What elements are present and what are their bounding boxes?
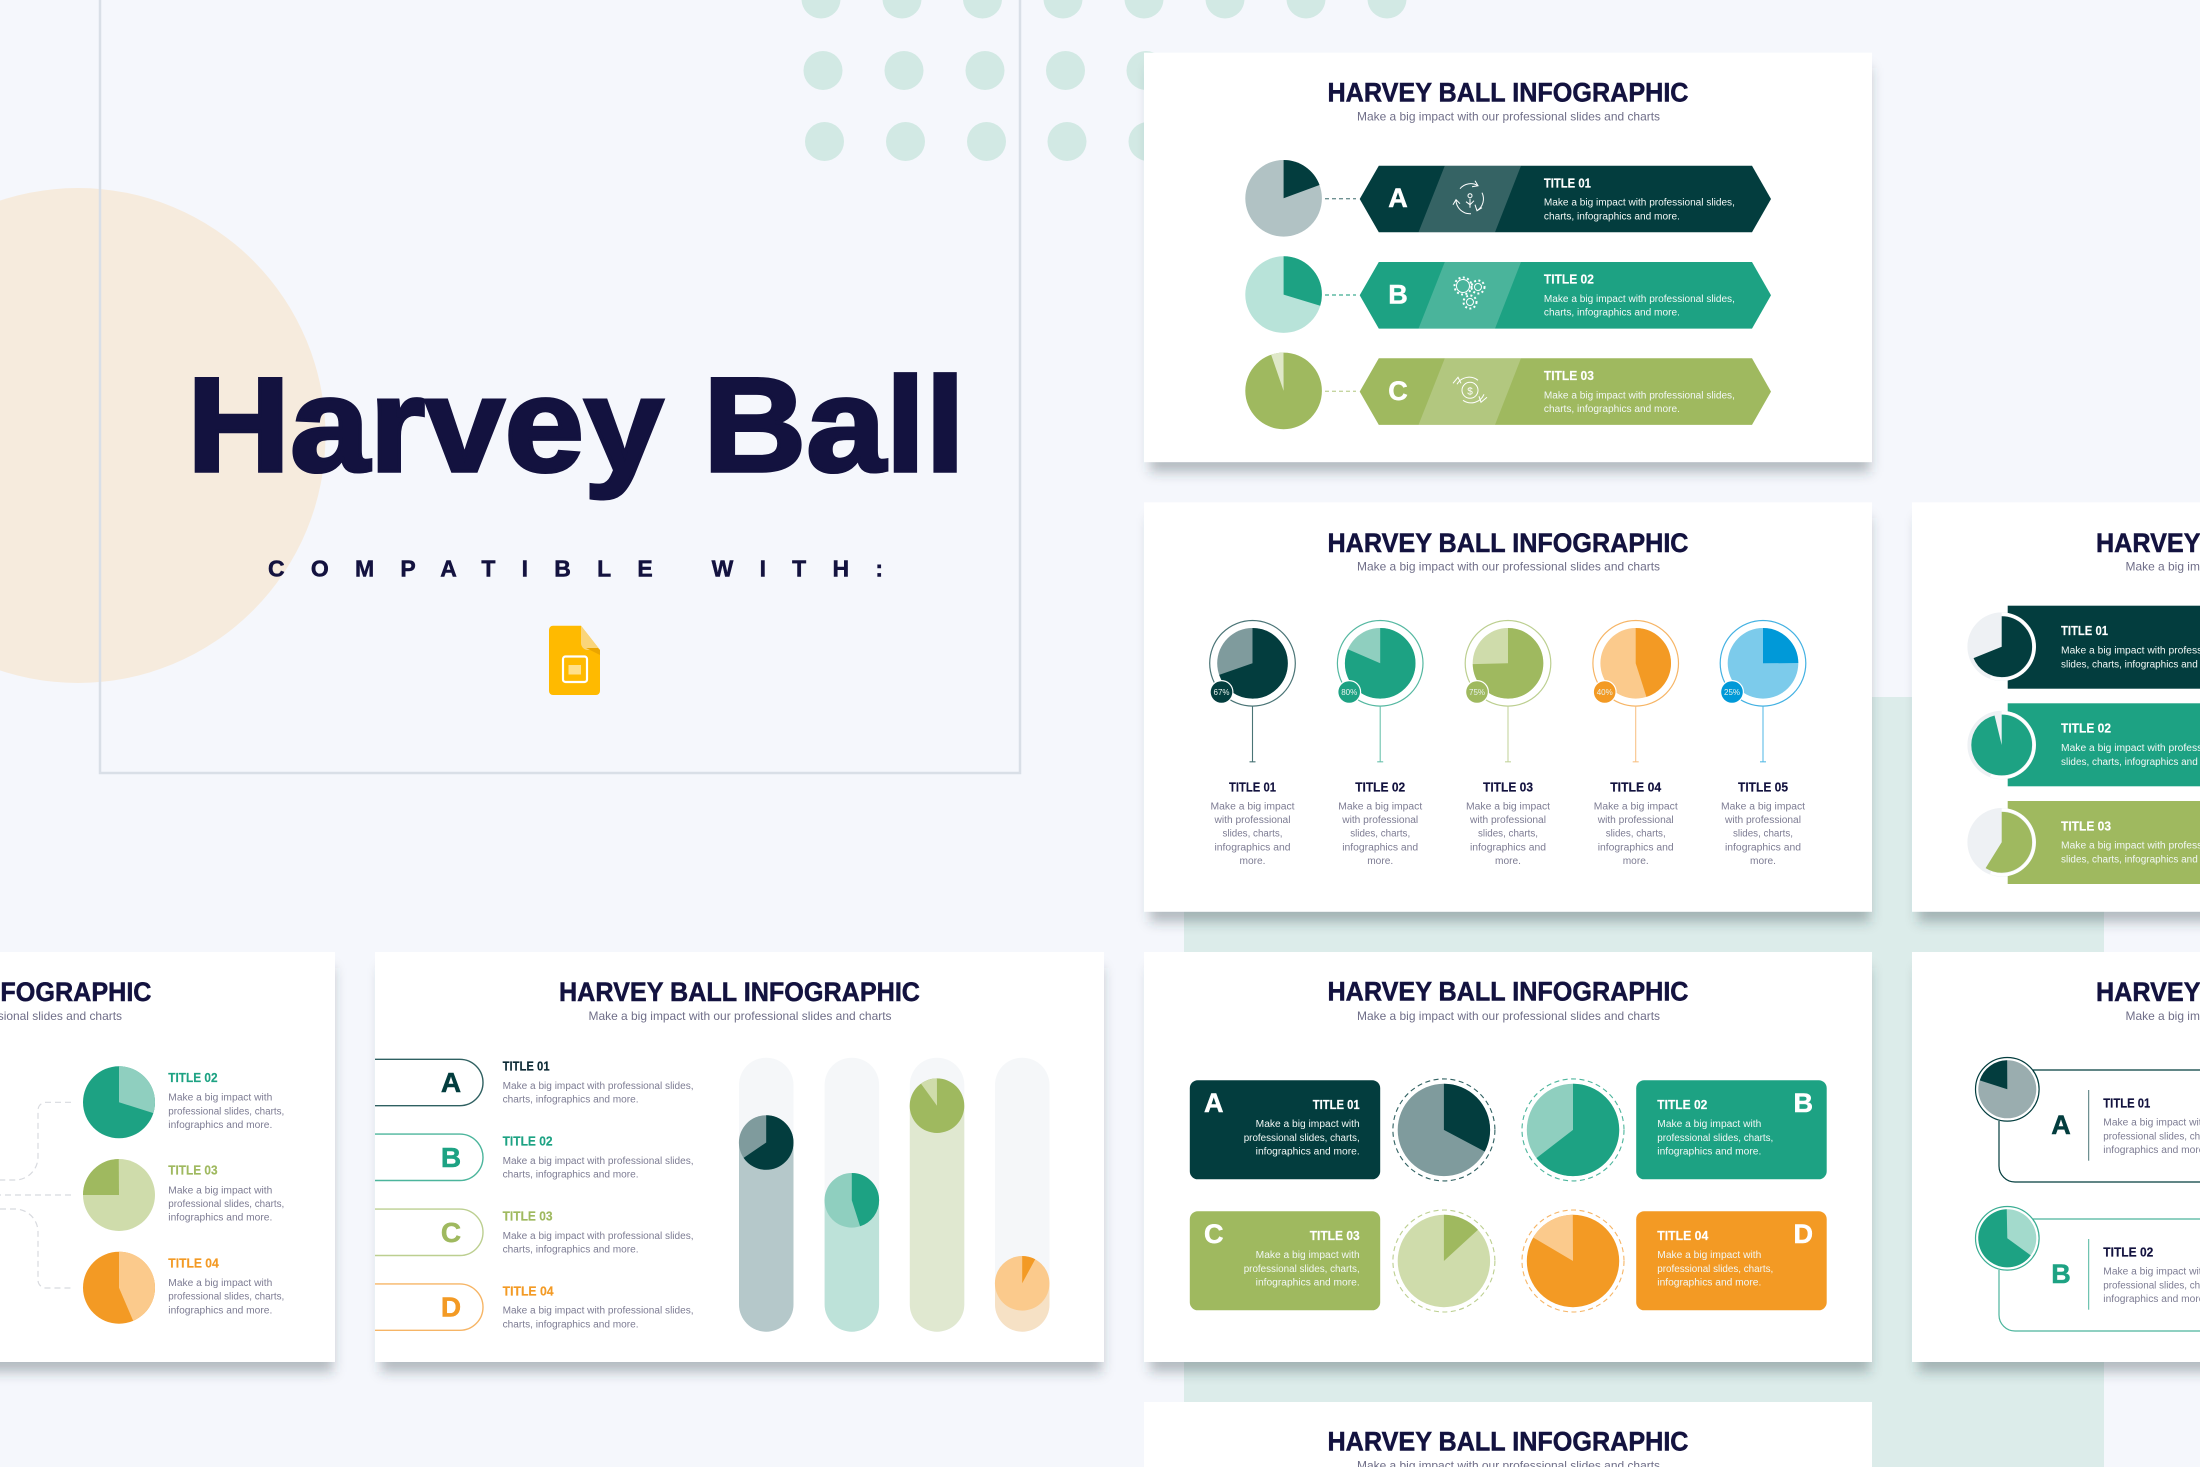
panel: bottom slide cropped (1144, 1402, 1872, 1467)
subheading: Make a big impact with our professional slides and charts (1357, 559, 1660, 573)
panel: right slide with outlined frames (1912, 952, 2200, 1362)
ball 67 percent (1210, 620, 1295, 867)
ball 25 percent: more. (1750, 856, 1776, 867)
list item B: TITLE 02 (503, 1134, 553, 1148)
card B: TITLE 02 (1657, 1097, 1707, 1112)
list item A: Make a big impact with professional slides, (503, 1081, 694, 1092)
row B: Make a big impact with professional slides, (1544, 294, 1735, 305)
row B (1245, 256, 1771, 333)
ball 80 percent: infographics and (1342, 842, 1418, 853)
item 02: infographics and more. (168, 1120, 272, 1131)
ball 40 percent: 40% (1597, 688, 1613, 697)
ball 25 percent: with professional (1724, 815, 1801, 826)
item B: TITLE 02 (2103, 1244, 2153, 1259)
ball B (1522, 1079, 1624, 1181)
subheading: Make a big impact with our professional slides and charts (588, 1009, 892, 1023)
row B: B (1388, 280, 1408, 310)
row 02: TITLE 02 (2061, 721, 2111, 736)
ball 80 percent: with professional (1341, 815, 1418, 826)
ball 25 percent: Make a big impact (1721, 801, 1805, 812)
panel: slide with vertical column balls (375, 952, 1104, 1362)
item 04: professional slides, charts, (168, 1292, 284, 1303)
item 03: TITLE 03 (168, 1163, 218, 1178)
ball 67 percent: Make a big impact (1211, 801, 1295, 812)
ball C (1393, 1210, 1495, 1312)
main title: Harvey Ball (187, 351, 965, 500)
item A: TITLE 01 (2103, 1095, 2150, 1110)
column 4 (995, 1058, 1050, 1332)
card B (1636, 1080, 1827, 1179)
item 02 (83, 1066, 284, 1138)
list item D: charts, infographics and more. (503, 1319, 639, 1330)
row B: TITLE 02 (1544, 272, 1594, 287)
list item A: charts, infographics and more. (503, 1095, 639, 1106)
ball 75 percent: TITLE 03 (1483, 780, 1533, 795)
ball 67 percent: slides, charts, (1222, 829, 1282, 840)
card B: infographics and more. (1657, 1147, 1761, 1158)
item 03: Make a big impact with (168, 1185, 272, 1196)
row C: charts, infographics and more. (1544, 404, 1680, 415)
heading: HARVEY BALL INFOGRAPHIC (1328, 976, 1688, 1006)
ball 25 percent: slides, charts, (1733, 829, 1793, 840)
ball 75 percent: infographics and (1470, 842, 1546, 853)
ball 75 percent (1465, 620, 1551, 867)
list item C: Make a big impact with professional slides, (503, 1231, 694, 1242)
cover frame (100, 0, 1020, 773)
item 04: infographics and more. (168, 1305, 272, 1316)
row A (1245, 160, 1771, 237)
beige circle (0, 188, 326, 683)
ball 75 percent: 75% (1469, 688, 1485, 697)
panel: slide with hexagon banners (1144, 53, 1872, 462)
list item C (375, 1208, 694, 1256)
heading: HARVEY BALL INFOGRAPHIC (559, 977, 920, 1007)
row A: A (1388, 183, 1408, 213)
item 04: Make a big impact with (168, 1278, 272, 1289)
item B (1976, 1206, 2200, 1331)
ball 80 percent: more. (1367, 856, 1393, 867)
list item C: C (441, 1217, 461, 1248)
card D: D (1793, 1219, 1813, 1249)
column 1 (739, 1058, 794, 1332)
ball 25 percent: infographics and (1725, 842, 1801, 853)
panel: slide with four cards (1144, 952, 1872, 1362)
ball 40 percent (1593, 620, 1678, 867)
column 3 (910, 1058, 964, 1332)
list item B: B (441, 1142, 461, 1173)
item 03 (83, 1159, 284, 1231)
card A: Make a big impact with (1256, 1119, 1360, 1130)
heading: HARVEY BALL INFOGRAPHIC (1328, 1426, 1688, 1456)
row A: charts, infographics and more. (1544, 211, 1680, 222)
row 02 (1967, 703, 2200, 786)
list item B (375, 1134, 694, 1180)
ball 25 percent (1720, 620, 1806, 867)
ball 67 percent: infographics and (1214, 842, 1290, 853)
ball 67 percent: more. (1240, 856, 1266, 867)
ball 75 percent: Make a big impact (1466, 801, 1550, 812)
ball 40 percent: with professional (1597, 815, 1674, 826)
row C: $ (1467, 386, 1473, 397)
item 02: TITLE 02 (168, 1070, 218, 1085)
ball 67 percent: 67% (1213, 688, 1230, 697)
card D (1636, 1211, 1827, 1310)
ball 40 percent: more. (1623, 856, 1649, 867)
row C (1245, 353, 1771, 429)
row 01 (1967, 606, 2200, 689)
card C: Make a big impact with (1256, 1250, 1360, 1261)
dot pattern (802, 0, 1406, 161)
compatible with label: COMPATIBLE WITH: (268, 556, 883, 582)
list item A: A (441, 1067, 461, 1098)
row C: Make a big impact with professional slides, (1544, 390, 1735, 401)
item 04: TITLE 04 (168, 1255, 220, 1270)
ball 75 percent: with professional (1469, 815, 1546, 826)
heading: HARVEY BALL INFOGRAPHIC (1328, 78, 1688, 108)
ball 67 percent: with professional (1213, 815, 1290, 826)
list item A (375, 1059, 694, 1106)
ball D (1522, 1210, 1624, 1312)
row 03 (1967, 801, 2200, 884)
ball 40 percent: TITLE 04 (1610, 780, 1662, 795)
item A: A (2051, 1110, 2071, 1140)
ball 40 percent: Make a big impact (1594, 801, 1678, 812)
row C: C (1388, 376, 1408, 406)
ball A (1393, 1079, 1495, 1181)
row A: Make a big impact with professional slides, (1544, 198, 1735, 209)
item 02: Make a big impact with (168, 1093, 272, 1104)
ball 25 percent: TITLE 05 (1738, 780, 1788, 795)
icon: google slides (549, 626, 600, 695)
card A: TITLE 01 (1313, 1097, 1360, 1112)
panel: slide with five ringed balls (1144, 502, 1872, 912)
dashed connectors (0, 1102, 71, 1288)
card C: infographics and more. (1256, 1278, 1360, 1289)
item A (1976, 1058, 2200, 1182)
card C (1190, 1211, 1380, 1310)
card C: C (1204, 1219, 1223, 1249)
list item C: charts, infographics and more. (503, 1244, 639, 1256)
row 03: TITLE 03 (2061, 819, 2111, 834)
ball 80 percent: Make a big impact (1338, 801, 1422, 812)
item 03: infographics and more. (168, 1213, 272, 1224)
ball 40 percent: slides, charts, (1606, 829, 1666, 840)
card D: TITLE 04 (1657, 1228, 1709, 1243)
ball 25 percent: 25% (1724, 688, 1740, 697)
card A: A (1204, 1088, 1223, 1118)
heading: HARVEY BALL INFOGRAPHIC (1328, 528, 1688, 558)
column 2 (824, 1058, 879, 1332)
subheading: Make a big impact with our professional slides and charts (1357, 1009, 1660, 1023)
card A: infographics and more. (1256, 1147, 1360, 1158)
ball 80 percent: TITLE 02 (1355, 780, 1405, 795)
ball 40 percent: infographics and (1598, 842, 1674, 853)
subheading: Make a big impact with our professional slides and charts (1357, 110, 1660, 124)
card A: professional slides, charts, (1244, 1133, 1360, 1144)
teal backdrop (1184, 697, 2104, 1467)
row B: charts, infographics and more. (1544, 308, 1680, 319)
card B: B (1793, 1088, 1813, 1118)
row C: TITLE 03 (1544, 368, 1594, 383)
row 01: TITLE 01 (2061, 623, 2108, 638)
card D: infographics and more. (1657, 1278, 1761, 1289)
list item D (375, 1283, 694, 1330)
item 04 (83, 1252, 284, 1324)
ball 80 percent (1337, 620, 1423, 867)
list item D: TITLE 04 (503, 1283, 554, 1298)
card C: TITLE 03 (1310, 1228, 1360, 1243)
item B: B (2051, 1259, 2071, 1289)
card A (1190, 1080, 1380, 1179)
ball 67 percent: TITLE 01 (1229, 780, 1276, 795)
row A: TITLE 01 (1544, 175, 1591, 190)
list item A: TITLE 01 (503, 1059, 550, 1074)
ball 80 percent: slides, charts, (1350, 829, 1410, 840)
card B: Make a big impact with (1657, 1119, 1761, 1130)
item 03: professional slides, charts, (168, 1199, 284, 1210)
list item B: Make a big impact with professional slides, (503, 1156, 694, 1167)
list item D: Make a big impact with professional slides, (503, 1306, 694, 1317)
list item C: TITLE 03 (503, 1208, 553, 1224)
card C: professional slides, charts, (1244, 1264, 1360, 1275)
card D: professional slides, charts, (1657, 1264, 1773, 1275)
list item B: charts, infographics and more. (503, 1170, 639, 1180)
card B: professional slides, charts, (1657, 1133, 1773, 1144)
ball 80 percent: 80% (1341, 688, 1357, 697)
panel: left slide cropped (0, 952, 335, 1362)
panel: right slide with bars (1912, 502, 2200, 912)
ball 75 percent: more. (1495, 856, 1521, 867)
item 02: professional slides, charts, (168, 1106, 284, 1117)
card D: Make a big impact with (1657, 1250, 1761, 1261)
list item D: D (441, 1292, 461, 1323)
ball 75 percent: slides, charts, (1478, 829, 1538, 840)
